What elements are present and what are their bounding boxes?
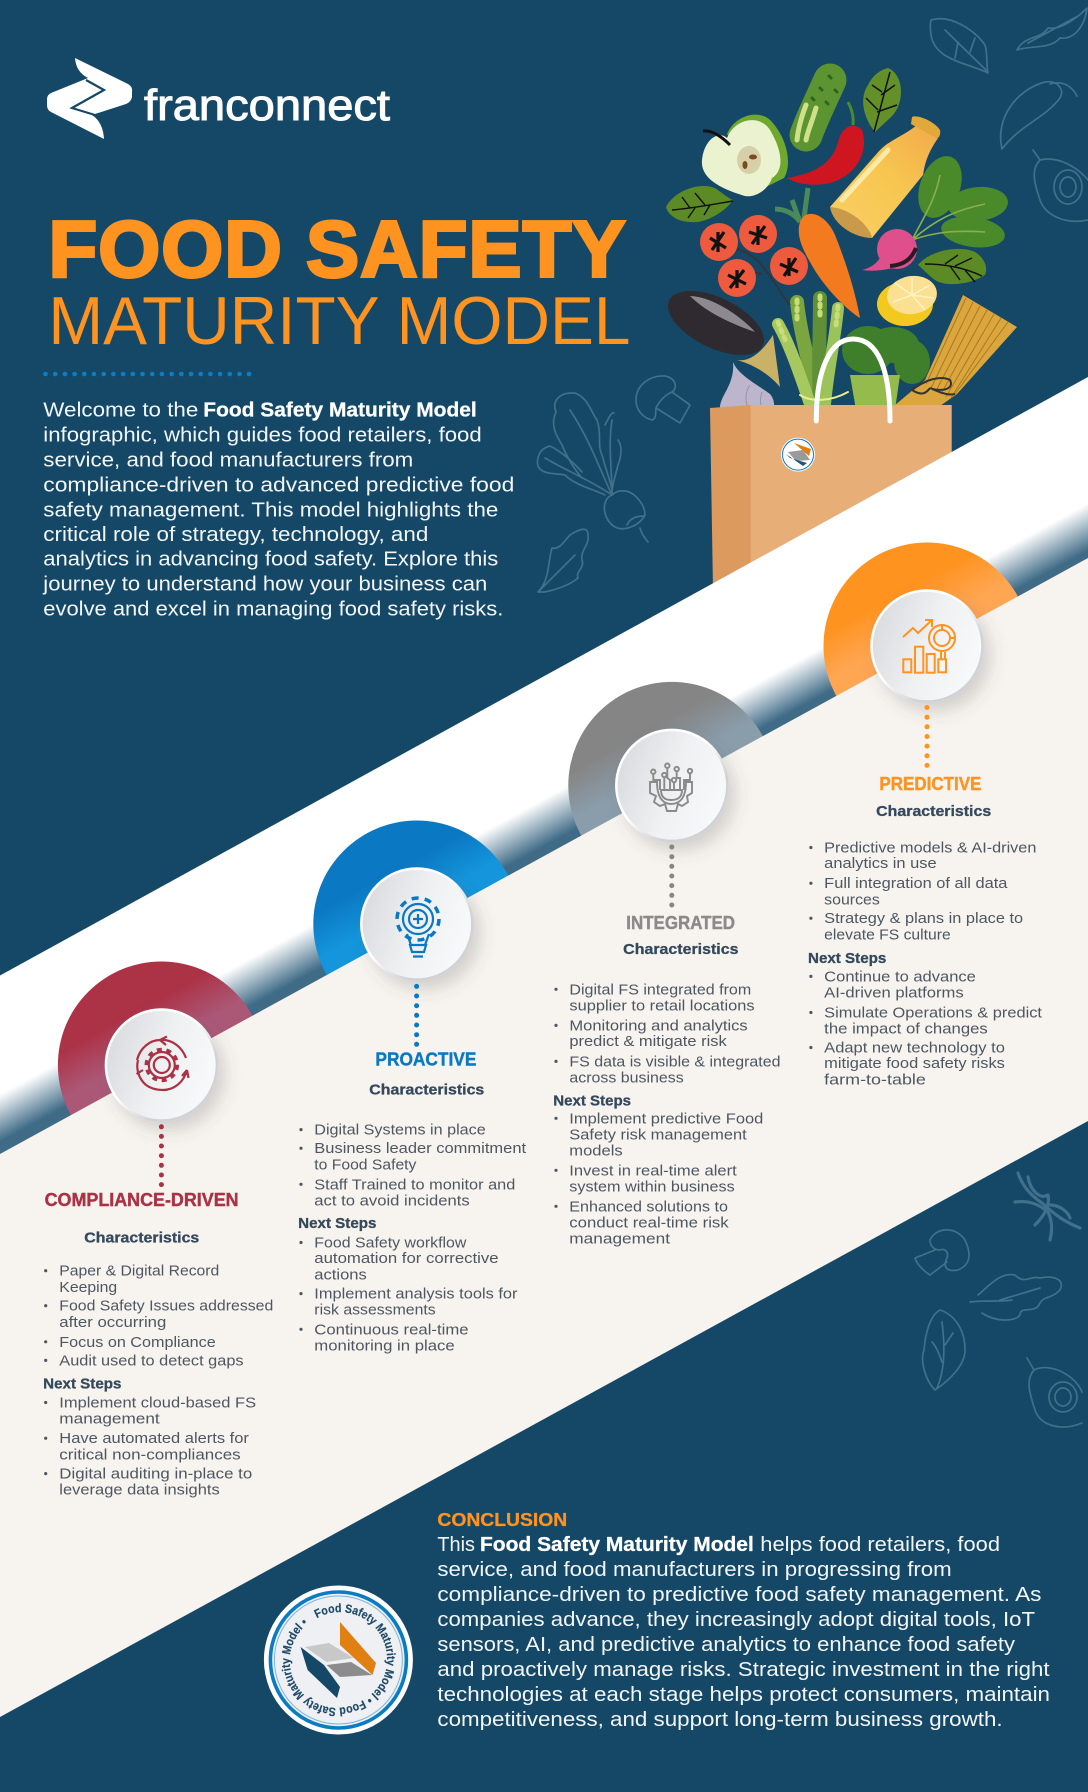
icon: broccoli	[842, 326, 930, 410]
arc: predictive	[824, 542, 1030, 750]
characteristics list	[809, 840, 1036, 943]
disc	[361, 868, 472, 980]
icon: left leaf	[666, 186, 733, 222]
intro paragraph: service, and food manufacturers from	[43, 450, 413, 472]
intro paragraph: safety management. This model highlights the	[43, 499, 498, 521]
characteristics list: Food Safety Issues addressed	[59, 1298, 273, 1315]
conclusion text: This	[437, 1534, 475, 1556]
next steps list: the impact of changes	[824, 1021, 988, 1038]
characteristics list: Paper & Digital Record	[59, 1263, 219, 1280]
next steps list: Continuous real-time	[314, 1321, 469, 1338]
characteristics list	[44, 1263, 273, 1369]
dotted divider	[43, 372, 251, 376]
icon: carrot	[775, 188, 860, 318]
stage 3: integrated	[553, 730, 780, 1247]
title: FOOD SAFETY	[48, 204, 626, 294]
characteristics list: after occurring	[59, 1314, 166, 1331]
next steps list	[553, 1092, 763, 1247]
next steps list: models	[569, 1142, 623, 1159]
next steps list: Adapt new technology to	[824, 1040, 1005, 1056]
next steps list: Next Steps	[298, 1215, 376, 1232]
next steps list: Implement analysis tools for	[314, 1286, 518, 1303]
icon: paper bag	[710, 339, 952, 590]
conclusion text: competitiveness, and support long-term business growth.	[437, 1709, 1003, 1731]
characteristics list: FS data is visible & integrated	[569, 1053, 780, 1070]
characteristics list: Predictive models & AI-driven	[824, 840, 1036, 856]
icon: gear with cycle arrows	[136, 1036, 188, 1090]
next steps list: conduct real-time risk	[569, 1214, 729, 1231]
logo: franconnect	[47, 58, 390, 139]
conclusion text: sensors, AI, and predictive analytics to enhance food safety	[437, 1634, 1015, 1656]
conclusion text: and proactively manage risks. Strategic investment in the right	[437, 1659, 1050, 1681]
characteristics list: analytics in use	[824, 855, 937, 872]
heading: COMPLIANCE-DRIVEN	[45, 1190, 239, 1210]
subheading: Characteristics	[623, 941, 738, 958]
characteristics list: sources	[824, 891, 880, 908]
icon: radish	[862, 229, 917, 271]
characteristics list: Digital FS integrated from	[569, 981, 751, 998]
characteristics list: Staff Trained to monitor and	[314, 1176, 515, 1193]
next steps list: Enhanced solutions to	[569, 1198, 728, 1215]
icon: asparagus	[778, 296, 848, 404]
next steps list: Invest in real-time alert	[569, 1162, 738, 1179]
next steps list: farm-to-table	[824, 1071, 926, 1088]
subheading: Characteristics	[84, 1230, 199, 1246]
icon: right leaf	[918, 249, 986, 284]
icon: light bulb with gear	[397, 898, 439, 956]
characteristics list: across business	[569, 1070, 684, 1086]
icon: pasta bundle	[895, 295, 1017, 420]
next steps list: leverage data insights	[59, 1482, 220, 1499]
icon: cherry tomatoes	[700, 215, 808, 305]
icon: franconnect mark	[47, 58, 132, 139]
conclusion	[437, 1510, 1050, 1731]
next steps list: management	[569, 1230, 671, 1247]
characteristics list: Digital Systems in place	[314, 1122, 486, 1139]
icon: juice bottle	[830, 116, 940, 238]
characteristics list: supplier to retail locations	[569, 997, 755, 1014]
conclusion heading: CONCLUSION	[437, 1510, 567, 1530]
characteristics list: predict & mitigate risk	[569, 1033, 727, 1050]
next steps list: automation for corrective	[314, 1250, 499, 1267]
subheading: Characteristics	[876, 803, 991, 820]
next steps list	[43, 1376, 256, 1499]
conclusion text: service, and food manufacturers in progressing from	[437, 1559, 952, 1581]
conclusion text: companies advance, they increasingly adopt digital tools, IoT	[437, 1609, 1035, 1631]
conclusion text	[437, 1534, 1050, 1731]
next steps list: Have automated alerts for	[59, 1430, 249, 1447]
background doodles: top right	[930, 8, 1088, 221]
arc: integrated	[568, 682, 775, 889]
intro paragraph: journey to understand how your business can	[42, 574, 487, 596]
intro paragraph	[42, 400, 514, 621]
intro paragraph: evolve and excel in managing food safety risks.	[43, 599, 503, 621]
illustration: groceries bursting from a paper bag	[658, 68, 1017, 590]
next steps list: risk assessments	[314, 1301, 436, 1318]
next steps list: Digital auditing in-place to	[59, 1466, 252, 1483]
cream panel	[0, 558, 1088, 1717]
next steps list: Next Steps	[808, 950, 886, 967]
next steps list: management	[59, 1411, 161, 1428]
heading: PROACTIVE	[375, 1050, 476, 1070]
icon: circuit gear	[650, 764, 692, 811]
intro paragraph: analytics in advancing food safety. Explore this	[43, 549, 498, 571]
icon: garlic	[720, 362, 774, 408]
characteristics list: Keeping	[59, 1279, 117, 1296]
intro paragraph: compliance-driven to advanced predictive food	[43, 475, 514, 497]
next steps list: Implement predictive Food	[569, 1110, 763, 1127]
next steps list: critical non-compliances	[59, 1446, 241, 1463]
dotted connector	[669, 844, 674, 908]
intro paragraph: critical role of strategy, technology, and	[43, 524, 428, 546]
icon: eggplant	[658, 278, 780, 387]
diagonal white band	[0, 377, 1088, 1156]
conclusion text: Food Safety Maturity Model	[480, 1534, 754, 1556]
characteristics list: elevate FS culture	[824, 926, 951, 943]
dotted connector	[924, 705, 930, 768]
disc	[106, 1010, 217, 1120]
next steps list: system within business	[569, 1178, 735, 1195]
next steps list: mitigate food safety risks	[824, 1055, 1005, 1072]
arc: proactive	[313, 820, 520, 1028]
logo wordmark: franconnect	[144, 81, 390, 130]
heading: INTEGRATED	[626, 913, 735, 933]
heading: PREDICTIVE	[879, 774, 981, 794]
icon: apple	[702, 115, 788, 196]
next steps list: Next Steps	[43, 1376, 121, 1393]
disc	[872, 590, 982, 702]
disc	[616, 730, 727, 841]
band shadow strip	[0, 494, 1088, 1156]
characteristics list: Audit used to detect gaps	[59, 1352, 244, 1369]
icon: bar chart with magnifier	[903, 620, 955, 673]
icon: bag sticker	[781, 438, 815, 472]
characteristics list: Business leader commitment	[314, 1140, 527, 1157]
conclusion text: compliance-driven to predictive food safety management. As	[437, 1584, 1041, 1606]
next steps list: AI-driven platforms	[824, 984, 964, 1002]
stage 4: predictive	[808, 590, 1043, 1088]
title	[48, 204, 630, 359]
icon: cucumber	[797, 76, 837, 140]
characteristics list: Full integration of all data	[824, 875, 1008, 892]
characteristics list: Monitoring and analytics	[569, 1017, 748, 1034]
characteristics list: Focus on Compliance	[59, 1334, 216, 1351]
intro paragraph: Welcome to the	[43, 400, 198, 422]
characteristics list: act to avoid incidents	[314, 1192, 470, 1209]
title: MATURITY MODEL	[48, 283, 630, 359]
subheading: Characteristics	[369, 1081, 484, 1098]
next steps list: Implement cloud-based FS	[59, 1394, 256, 1412]
background doodles: bottom right	[915, 1173, 1082, 1427]
characteristics list: to Food Safety	[314, 1156, 417, 1173]
intro paragraph: infographic, which guides food retailers, food	[43, 425, 482, 447]
next steps list: Continue to advance	[824, 968, 976, 985]
characteristics list	[554, 981, 780, 1086]
dotted connector	[414, 984, 419, 1047]
next steps list: Simulate Operations & predict	[824, 1004, 1043, 1022]
next steps list: actions	[314, 1266, 367, 1283]
next steps list: Next Steps	[553, 1092, 631, 1109]
stage 1: compliance-driven	[43, 1010, 273, 1499]
icon: spinach bunch	[910, 150, 1009, 251]
conclusion text: helps food retailers, food	[760, 1534, 1000, 1556]
badge: food safety maturity model seal: Food Safety Maturity Model • Food Safety Maturity Model •	[282, 1603, 396, 1716]
conclusion text: technologies at each stage helps protect consumers, maintain	[437, 1684, 1050, 1706]
stage 2: proactive	[298, 868, 527, 1354]
dotted connector	[159, 1124, 164, 1187]
next steps list	[298, 1215, 518, 1354]
badge: food safety maturity model seal	[264, 1586, 413, 1734]
next steps list: monitoring in place	[314, 1337, 455, 1354]
next steps list	[808, 950, 1043, 1088]
next steps list: Safety risk management	[569, 1126, 748, 1143]
icon: basil leaf top	[863, 68, 901, 132]
icon: lemon	[877, 273, 939, 326]
intro paragraph: Food Safety Maturity Model	[203, 400, 477, 422]
arc: compliance-driven	[58, 962, 265, 1168]
characteristics list: Strategy & plans in place to	[824, 910, 1023, 927]
icon: chili pepper	[787, 102, 864, 185]
characteristics list	[299, 1122, 527, 1209]
next steps list: Food Safety workflow	[314, 1234, 467, 1252]
background doodles: radish, mushroom, leaf	[538, 376, 690, 592]
